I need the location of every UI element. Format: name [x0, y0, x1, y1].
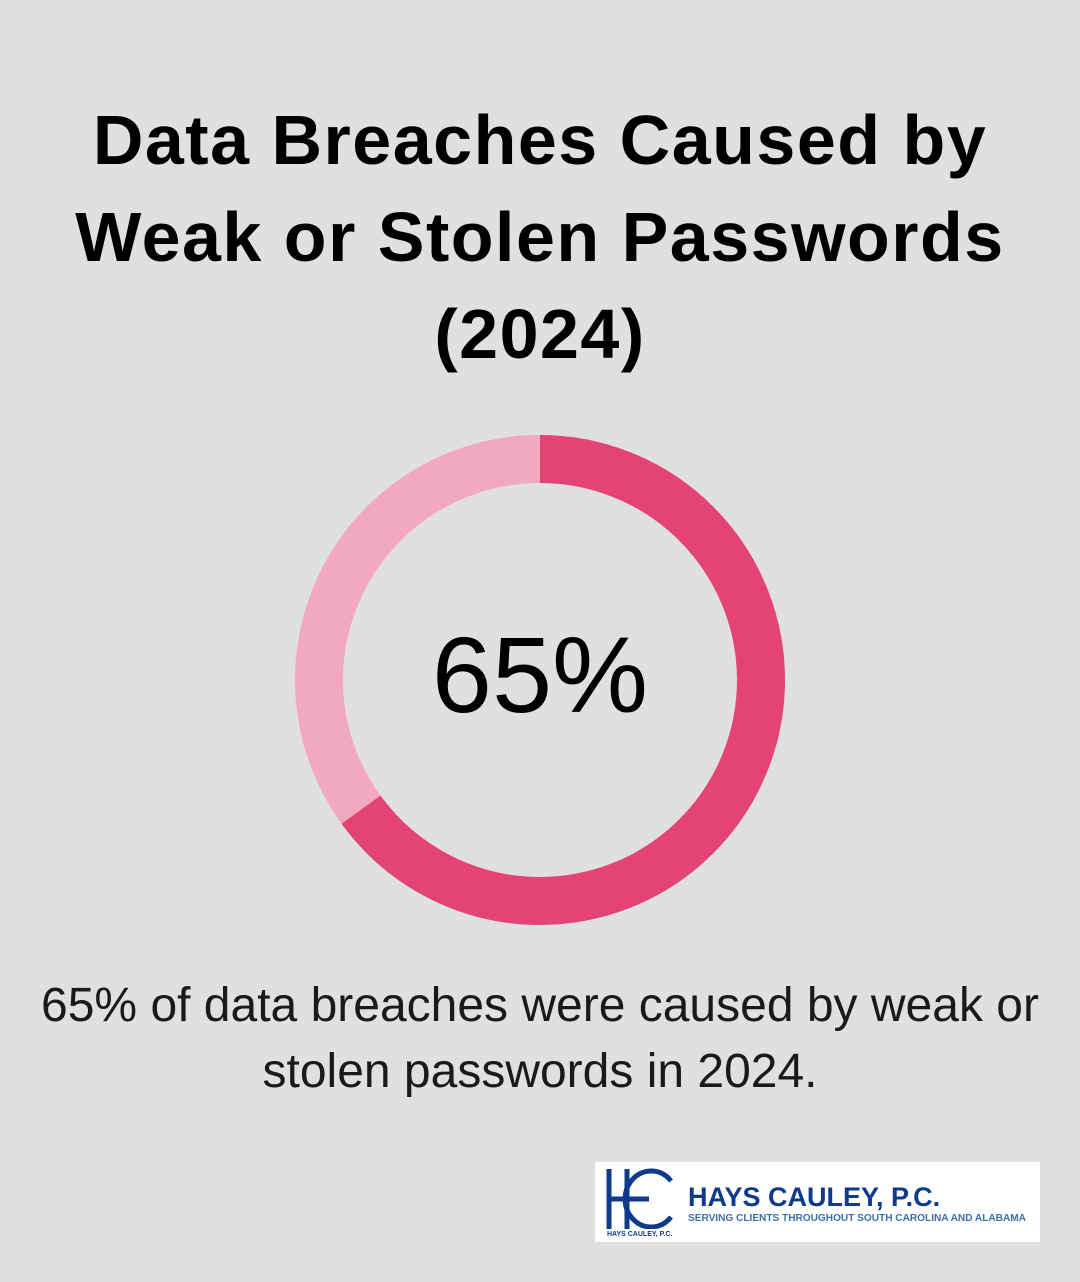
- title: (2024): [434, 295, 646, 373]
- icon: HC monogram: [606, 1168, 673, 1229]
- tagline: SERVING CLIENTS THROUGHOUT SOUTH CAROLINA AND ALABAMA: [688, 1213, 1026, 1224]
- caption: stolen passwords in 2024.: [262, 1045, 818, 1098]
- caption: [41, 979, 1039, 1098]
- company name: HAYS CAULEY, P.C.: [688, 1182, 940, 1212]
- title: Weak or Stolen Passwords: [75, 198, 1005, 276]
- logo: [595, 1162, 1040, 1242]
- title: Data Breaches Caused by: [93, 101, 987, 179]
- title: [75, 101, 1005, 373]
- caption: 65% of data breaches were caused by weak or: [41, 979, 1039, 1032]
- small label: HAYS CAULEY, P.C.: [607, 1231, 672, 1238]
- donut chart: 65%: [432, 614, 648, 735]
